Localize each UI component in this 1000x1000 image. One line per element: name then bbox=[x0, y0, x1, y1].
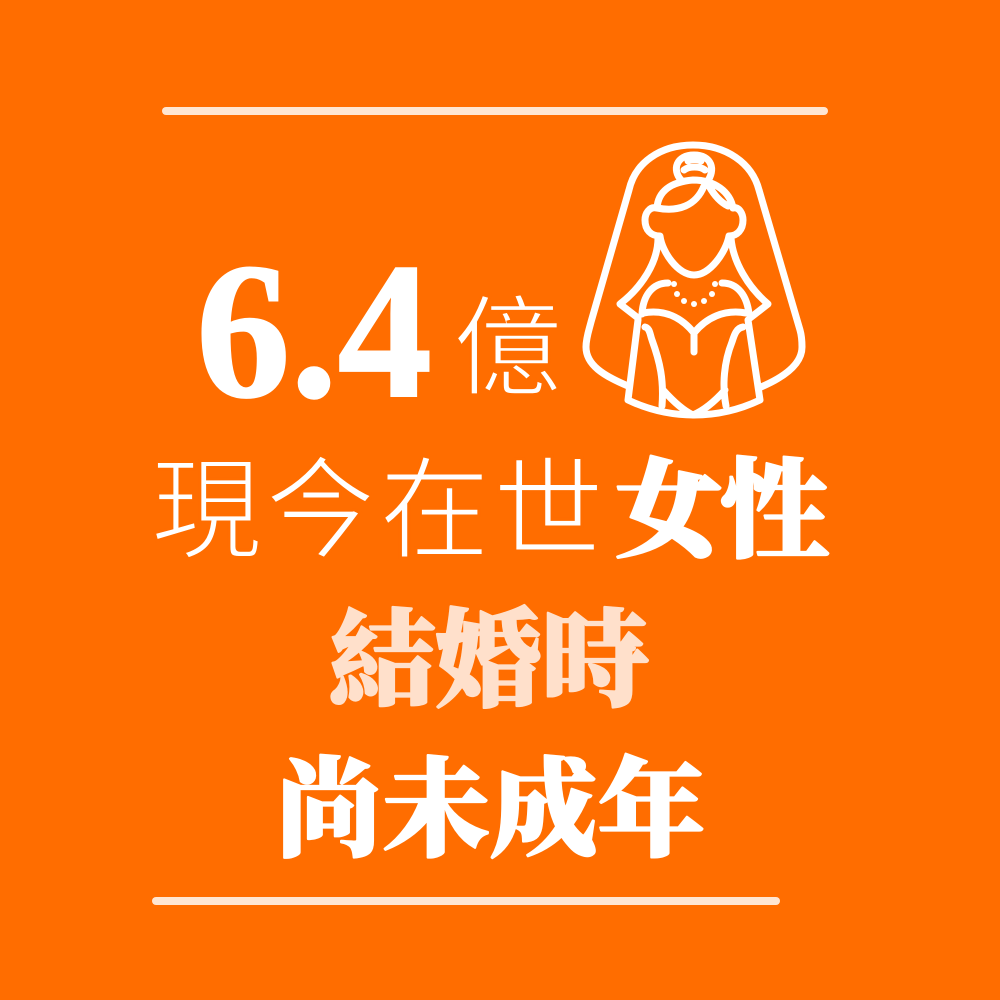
gown outer bbox=[628, 320, 760, 415]
top rule bbox=[162, 107, 828, 115]
heading: 女性: 女性 bbox=[613, 424, 829, 579]
shoulders and arms bbox=[620, 238, 768, 318]
neckline bbox=[642, 283, 749, 314]
necklace pearls bbox=[671, 281, 718, 307]
unit: 億: 億 bbox=[453, 288, 562, 410]
number: 6.4: 6.4 bbox=[196, 223, 432, 438]
bottom rule bbox=[152, 897, 780, 905]
icon: bride with veil bbox=[586, 145, 802, 415]
gown folds bbox=[645, 327, 743, 415]
hair bun bbox=[676, 155, 712, 182]
heading: 尚未成年: 尚未成年 bbox=[275, 723, 705, 878]
bodice bbox=[643, 312, 746, 352]
heading: 結婚時: 結婚時 bbox=[329, 575, 648, 728]
face and ears bbox=[645, 208, 743, 275]
heading: 現今在世: 現今在世 bbox=[151, 449, 607, 573]
veil bbox=[586, 145, 802, 387]
hair bbox=[657, 180, 733, 209]
